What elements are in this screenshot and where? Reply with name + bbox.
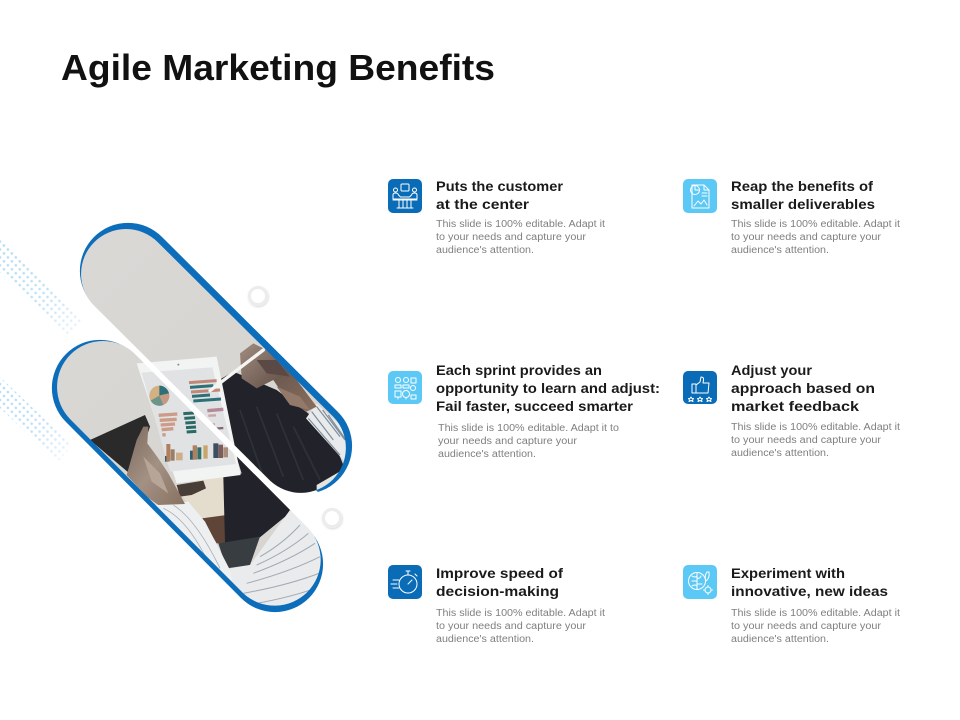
right hand: [240, 343, 317, 412]
benefit: smaller deliverables: [683, 178, 900, 256]
benefit: speed of decision-making: [388, 565, 605, 645]
left hand: [127, 427, 185, 505]
pie chart: [149, 386, 169, 406]
heading: Reap the benefits of: [731, 178, 873, 194]
icon: customer meeting: [388, 179, 422, 213]
middle teal bars: [183, 413, 196, 432]
description: to your needs and capture your: [436, 232, 587, 243]
heading: Puts the customer: [436, 178, 564, 194]
wall: [57, 229, 344, 572]
heading: smaller deliverables: [731, 196, 875, 212]
heading: at the center: [436, 196, 530, 212]
ring: upper: [250, 288, 266, 304]
description: audience's attention.: [438, 449, 536, 460]
upper sleeve: [306, 404, 346, 460]
decorative dotted band: lower: [0, 377, 72, 462]
icon: stopwatch: [388, 565, 422, 599]
title: Agile Marketing Benefits: [61, 47, 495, 88]
ring: lower: [324, 510, 340, 526]
heading: Adjust your: [731, 362, 813, 378]
stylus: [210, 350, 263, 391]
lower trousers: [218, 537, 260, 568]
icon: brain with gears: [683, 565, 717, 599]
lower hand fingers under tablet: [177, 481, 206, 497]
description: to your needs and capture your: [436, 621, 587, 632]
description: to your needs and capture your: [731, 232, 882, 243]
lower right cloth stripes: [230, 510, 321, 606]
benefit: each sprint: [388, 362, 660, 460]
heading: Each sprint provides an: [436, 362, 602, 378]
lower capsule blue backing: [52, 340, 323, 612]
beige floor: [183, 478, 224, 518]
description: audience's attention.: [731, 448, 829, 459]
icon: sprint team: [388, 371, 422, 404]
benefit: market feedback: [683, 362, 900, 459]
description: audience's attention.: [436, 634, 534, 645]
description: This slide is 100% editable. Adapt it: [731, 608, 900, 619]
heading: market feedback: [731, 398, 859, 414]
trousers left: [90, 415, 150, 477]
heading: Improve speed of: [436, 565, 563, 581]
photo: hands holding a tablet: [57, 229, 346, 606]
tablet: [137, 357, 241, 483]
description: This slide is 100% editable. Adapt it: [731, 422, 900, 433]
description: to your needs and capture your: [731, 621, 882, 632]
heading: approach based on: [731, 380, 875, 396]
white slit between capsules: [120, 321, 320, 506]
column chart: [165, 443, 228, 462]
description: audience's attention.: [731, 634, 829, 645]
description: audience's attention.: [731, 245, 829, 256]
description: This slide is 100% editable. Adapt it: [731, 219, 900, 230]
decorative dotted band: upper: [0, 238, 85, 336]
dark shirt: [213, 372, 347, 543]
description: audience's attention.: [436, 245, 534, 256]
description: This slide is 100% editable. Adapt it: [436, 219, 605, 230]
heading: Experiment with: [731, 565, 845, 581]
heading: innovative, new ideas: [731, 583, 888, 599]
heading: opportunity to learn and adjust:: [436, 380, 660, 396]
icon: thumbs up with stars: [683, 371, 717, 404]
right small bars: [207, 409, 223, 411]
description: to your needs and capture your: [731, 435, 882, 446]
description: This slide is 100% editable. Adapt it: [436, 608, 605, 619]
description: This slide is 100% editable. Adapt it to: [438, 423, 619, 434]
top right bars: [189, 381, 221, 401]
photo capsule graphic: [43, 217, 360, 620]
description: your needs and capture your: [438, 436, 578, 447]
upper capsule blue backing: [80, 223, 352, 494]
icon: document with charts: [683, 179, 717, 213]
heading: decision-making: [436, 583, 559, 599]
benefit: innovative new ideas: [683, 565, 900, 645]
benefit: customer at the center: [388, 178, 605, 256]
lower sleeve: [156, 502, 231, 580]
heading: Fail faster, succeed smarter: [436, 398, 634, 414]
middle left bars: [159, 414, 177, 435]
